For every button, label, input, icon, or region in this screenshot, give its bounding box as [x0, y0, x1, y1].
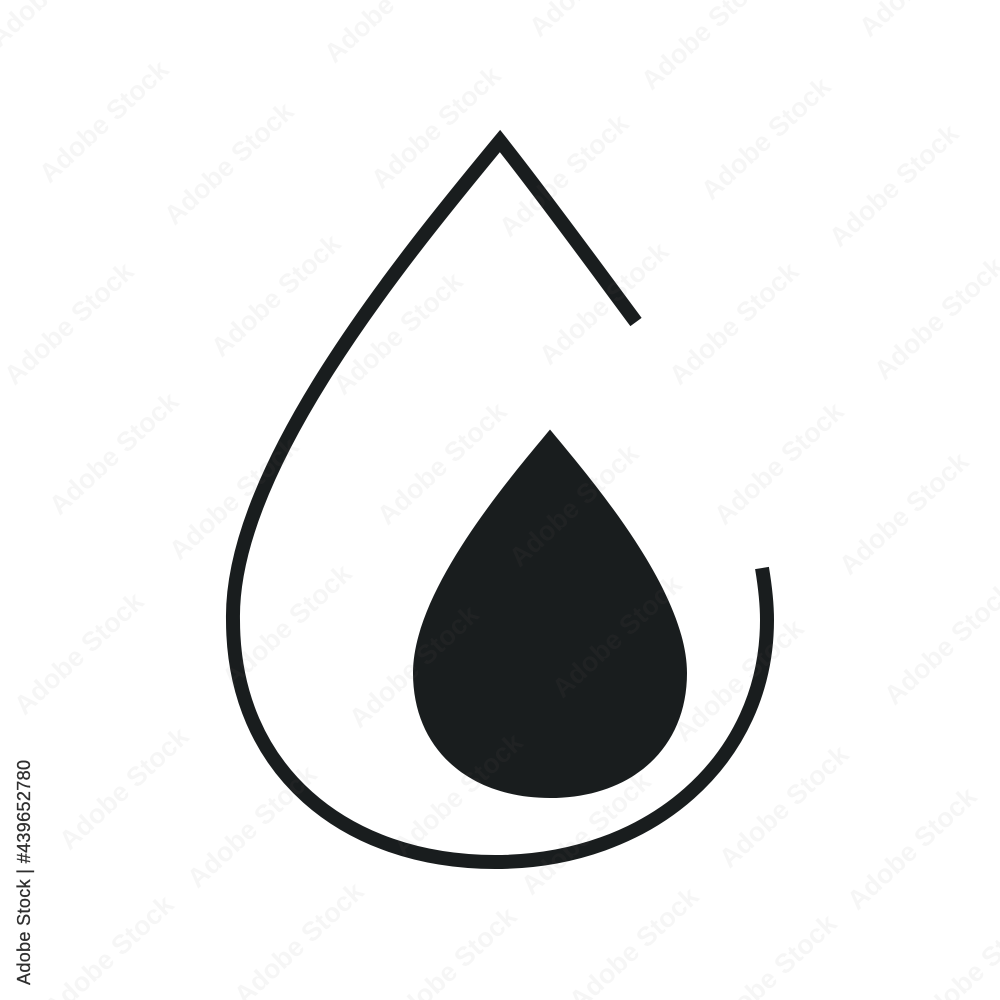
watermark: repeated Adobe Stock text: Adobe Stock	[371, 396, 513, 531]
watermark: repeated Adobe Stock text: Adobe Stock	[823, 118, 965, 253]
watermark: repeated Adobe Stock text: Adobe Stock	[695, 71, 837, 206]
watermark: repeated Adobe Stock text: Adobe Stock	[387, 727, 529, 862]
watermark: repeated Adobe Stock text: Adobe Stock	[365, 60, 507, 195]
watermark: repeated Adobe Stock text: Adobe Stock	[668, 613, 810, 748]
watermark: repeated Adobe Stock text: Adobe Stock	[8, 586, 150, 721]
watermark: repeated Adobe Stock text: Adobe Stock	[841, 781, 983, 916]
watermark: repeated Adobe Stock text: Adobe Stock	[503, 438, 645, 573]
watermark: repeated Adobe Stock text: Adobe Stock	[713, 739, 855, 874]
watermark: repeated Adobe Stock text: Adobe Stock	[205, 228, 347, 363]
watermark: repeated Adobe Stock text: Adobe Stock	[216, 558, 358, 693]
watermark: repeated Adobe Stock text: Adobe Stock	[343, 599, 485, 734]
watermark: repeated Adobe Stock text: Adobe Stock	[663, 256, 805, 391]
watermark: repeated Adobe Stock text: Adobe Stock	[833, 446, 975, 581]
watermark: repeated Adobe Stock text: Adobe Stock	[0, 256, 140, 391]
side credit text: Adobe Stock | #439652780	[14, 760, 34, 985]
watermark: repeated Adobe Stock text: Adobe Stock	[181, 759, 323, 894]
watermark: repeated Adobe Stock text: Adobe Stock	[163, 431, 305, 566]
watermark: repeated Adobe Stock text: Adobe Stock	[53, 721, 195, 856]
watermark: repeated Adobe Stock text: Adobe Stock	[515, 766, 657, 901]
watermark: repeated Adobe Stock text: Adobe Stock	[493, 108, 635, 243]
watermark: repeated Adobe Stock text: Adobe Stock	[708, 396, 850, 531]
icon: open outline water drop	[233, 141, 767, 862]
icon: solid inner water drop	[413, 430, 687, 798]
watermark: repeated Adobe Stock text: Adobe Stock	[158, 96, 300, 231]
watermark: repeated Adobe Stock text: Adobe Stock	[327, 266, 469, 401]
watermark: repeated Adobe Stock text: Adobe Stock	[546, 569, 688, 704]
watermark: repeated Adobe Stock text: Adobe Stock	[533, 236, 675, 371]
watermark: repeated Adobe Stock text: Adobe Stock	[33, 54, 175, 189]
watermark: repeated Adobe Stock text: Adobe Stock	[43, 386, 185, 521]
